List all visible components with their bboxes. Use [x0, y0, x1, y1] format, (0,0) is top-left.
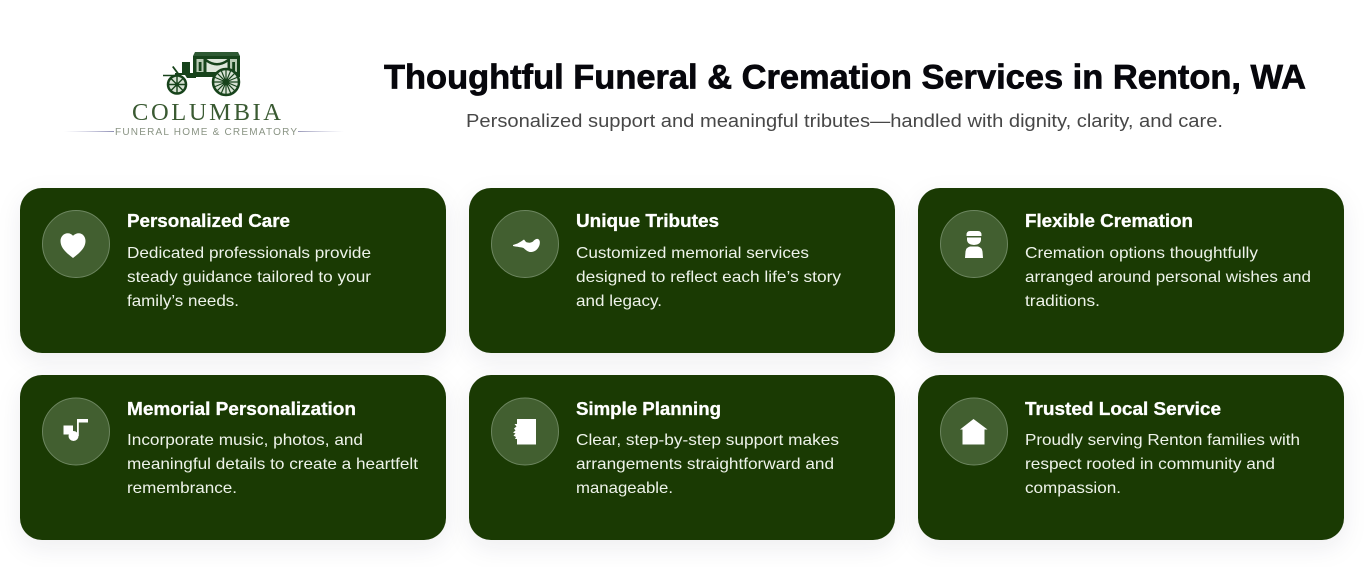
text block: designed to reflect each life’s story	[576, 269, 841, 286]
panel: Trusted Local Service	[918, 375, 1344, 540]
text block: and legacy.	[576, 293, 662, 310]
text block: Dedicated professionals provide	[127, 245, 371, 262]
text block	[127, 432, 419, 497]
icon: notebook	[492, 398, 558, 465]
heading: Flexible Cremation	[1025, 211, 1193, 231]
heading: Memorial Personalization	[127, 399, 356, 419]
panel: Personalized Care	[20, 188, 446, 353]
icon: music note	[42, 398, 110, 465]
text block: family’s needs.	[127, 293, 239, 310]
text block: traditions.	[1025, 293, 1100, 310]
text block	[1025, 432, 1300, 497]
text block: Incorporate music, photos, and	[127, 432, 363, 449]
text block: respect rooted in community and	[1025, 456, 1275, 473]
icon: person with cap	[940, 210, 1008, 278]
icon: heart	[42, 210, 110, 278]
text block: Clear, step-by-step support makes	[576, 432, 839, 449]
panel: Unique Tributes	[469, 188, 895, 353]
text block: compassion.	[1025, 480, 1121, 497]
text block: meaningful details to create a heartfelt	[127, 456, 419, 473]
text block: steady guidance tailored to your	[127, 269, 372, 286]
logo tagline: FUNERAL HOME & CREMATORY	[115, 127, 297, 138]
subtitle: Personalized support and meaningful tributes—handled with dignity, clarity, and care.	[466, 110, 1223, 131]
logo wordmark: COLUMBIA	[132, 99, 281, 126]
panel: Simple Planning	[469, 375, 895, 540]
text block: Proudly serving Renton families with	[1025, 432, 1300, 449]
text block: Cremation options thoughtfully	[1025, 245, 1258, 262]
text block: arrangements straightforward and	[576, 456, 834, 473]
logo: Columbia Funeral Home & Crematory	[64, 52, 344, 138]
text block: Customized memorial services	[576, 245, 809, 262]
heading: Unique Tributes	[576, 211, 719, 231]
panel: Memorial Personalization	[20, 375, 446, 540]
title: Thoughtful Funeral & Cremation Services in Renton, WA	[384, 58, 1306, 96]
text block: arranged around personal wishes and	[1025, 269, 1311, 286]
icon: horse-drawn carriage	[163, 52, 240, 95]
text block: manageable.	[576, 480, 673, 497]
panel: Flexible Cremation	[918, 188, 1344, 353]
heading: Personalized Care	[127, 211, 290, 231]
text block	[576, 245, 841, 310]
heading: Trusted Local Service	[1025, 399, 1221, 419]
heading: Simple Planning	[576, 399, 721, 419]
text block: remembrance.	[127, 480, 237, 497]
text block	[127, 245, 372, 310]
icon: dove	[492, 210, 558, 278]
text block	[576, 432, 839, 497]
icon: house	[940, 398, 1008, 465]
text block	[1025, 245, 1311, 310]
